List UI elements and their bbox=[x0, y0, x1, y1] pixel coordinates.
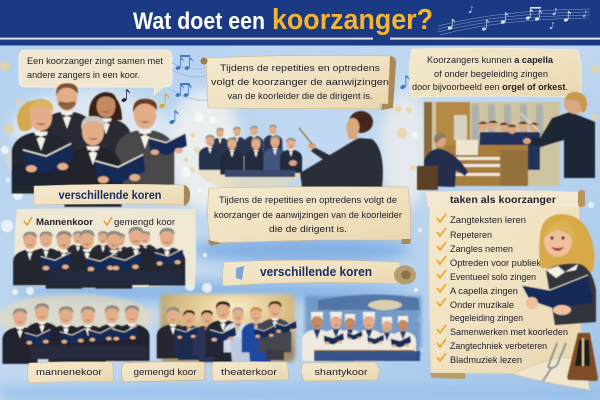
illustration: choir and conductor bbox=[198, 111, 383, 190]
panel: taken als koorzanger bbox=[426, 190, 585, 379]
checklist: Repeteren bbox=[450, 230, 492, 240]
label: shantykoor: shantykoor bbox=[314, 367, 368, 378]
label: shantykoor bbox=[301, 362, 380, 381]
checklist: Samenwerken met koorleden bbox=[450, 327, 568, 337]
banner: verschillende koren 2: verschillende koren bbox=[260, 265, 372, 279]
illustration: organ, choir and conductor bbox=[417, 92, 595, 190]
parchment: a capella: Koorzangers kunnen a capella bbox=[427, 55, 554, 65]
speech bubble: samen zingen bbox=[19, 50, 172, 95]
illustration: four singers bbox=[5, 83, 187, 207]
panel: mannenkoor en gemengd koor bbox=[13, 208, 196, 289]
icon: blue and gold notes by the bubble bbox=[121, 55, 410, 125]
parchment: herhaalde tekst dirigent bbox=[208, 187, 411, 246]
checklist: A capella zingen bbox=[450, 286, 518, 296]
illustration: men's choir bbox=[13, 227, 185, 289]
checklist: Optreden voor publiek bbox=[450, 258, 541, 268]
speech bubble: samen zingen: andere zangers in een koor. bbox=[27, 70, 140, 80]
label: mannenekoor: mannenekoor bbox=[36, 367, 102, 378]
parchment: dirigent bbox=[200, 55, 396, 110]
parchment: herhaalde tekst dirigent: Tijdens de repetities en optredens volgt de bbox=[219, 195, 397, 205]
parchment: a capella: door bijvoorbeeld een orgel of orkest. bbox=[412, 82, 568, 92]
banner: verschillende koren 2 bbox=[223, 260, 416, 286]
parchment: dirigent: Tijdens de repetities en optredens bbox=[220, 63, 381, 73]
header music notes bbox=[438, 6, 590, 35]
check labels bbox=[24, 217, 175, 228]
banner: verschillende koren 1 bbox=[34, 184, 190, 206]
parchment: a capella bbox=[410, 48, 581, 97]
illustration: theaterkoor bbox=[157, 294, 297, 362]
checklist: Bladmuziek lezen bbox=[450, 355, 522, 365]
parchment: dirigent: volgt de koorzanger de aanwijzingen bbox=[211, 77, 389, 87]
checklist: Zangles nemen bbox=[450, 244, 513, 254]
checklist: Eventueel solo zingen bbox=[450, 272, 536, 282]
checklist: Onder muzikale bbox=[450, 300, 514, 310]
checklist: Zangteksten leren bbox=[450, 215, 526, 225]
label: theaterkoor: theaterkoor bbox=[221, 367, 277, 378]
speech bubble: samen zingen: Een koorzanger zingt samen met bbox=[27, 56, 164, 66]
illustration: shantykoor bbox=[302, 294, 421, 361]
parchment: dirigent: van de koorleider die de dirigent is. bbox=[228, 91, 372, 101]
parchment: herhaalde tekst dirigent: die de dirigent is. bbox=[269, 224, 347, 234]
illustration: singing woman with book bbox=[522, 214, 596, 325]
checklist: Zangtechniek verbeteren bbox=[450, 341, 547, 351]
panel heading scroll: taken als koorzanger bbox=[450, 194, 556, 206]
illustration: mannenekoor bbox=[0, 294, 153, 364]
panel heading scroll bbox=[426, 190, 585, 207]
header band bbox=[0, 0, 600, 46]
checklist: begeleiding zingen bbox=[450, 313, 523, 323]
label: gemengd koor: gemengd koor bbox=[134, 367, 196, 378]
title highlight: koorzanger? bbox=[272, 4, 433, 36]
checklist bbox=[437, 214, 568, 365]
title: Wat doet een bbox=[133, 8, 265, 35]
parchment: a capella: of onder begeleiding zingen bbox=[434, 69, 548, 79]
label: gemengd koor bbox=[122, 362, 205, 382]
illustration: sheet music, tuning fork, metronome bbox=[512, 333, 598, 390]
banner: verschillende koren 1: verschillende koren bbox=[58, 190, 162, 202]
parchment: herhaalde tekst dirigent: koorzanger de aanwijzingen van de koorleider bbox=[214, 210, 402, 220]
check labels: gemengd koor bbox=[114, 217, 175, 228]
label: theaterkoor bbox=[212, 362, 288, 381]
check labels: Mannenkoor bbox=[36, 217, 93, 228]
label: mannenekoor bbox=[28, 362, 114, 383]
